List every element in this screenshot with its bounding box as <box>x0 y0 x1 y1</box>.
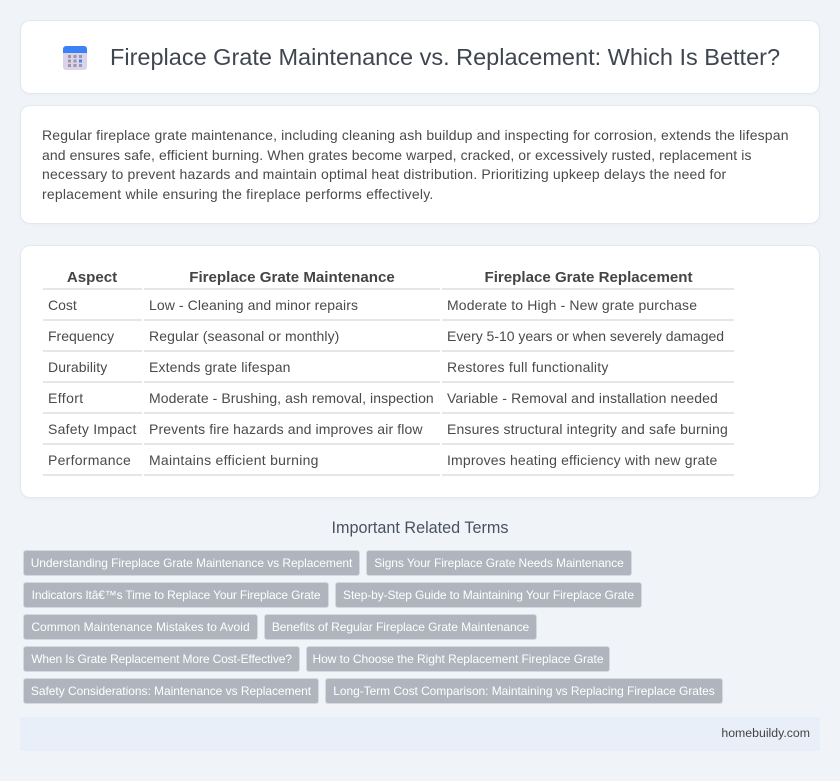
row: frequency: Frequency <box>48 328 114 344</box>
table header: Fireplace Grate Replacement <box>484 269 693 286</box>
tag <box>23 646 300 672</box>
row: frequency: Regular (seasonal or monthly) <box>149 328 339 344</box>
row: performance <box>48 452 717 468</box>
tag: Indicators Itâ€™s Time to Replace Your Fireplace Grate <box>32 588 320 602</box>
row: performance: Performance <box>48 452 131 468</box>
row: durability: Extends grate lifespan <box>149 359 291 375</box>
row: cost <box>48 297 697 313</box>
tag <box>23 614 258 640</box>
row: cost: Cost <box>48 297 77 313</box>
row: frequency <box>48 328 724 344</box>
tag <box>366 550 632 576</box>
tag <box>335 582 642 608</box>
tag: Safety Considerations: Maintenance vs Replacement <box>31 684 311 698</box>
row: safety impact: Safety Impact <box>48 421 137 437</box>
table header: Aspect <box>67 269 117 286</box>
intro text: and ensures safe, efficient burning. When grates become warped, cracked, or excessively rusted, replacement is <box>42 146 752 162</box>
row: safety impact: Ensures structural integrity and safe burning <box>447 421 728 437</box>
row: cost: Low - Cleaning and minor repairs <box>149 297 358 313</box>
row: frequency: Every 5-10 years or when severely damaged <box>447 328 724 344</box>
tag: Long-Term Cost Comparison: Maintaining vs Replacing Fireplace Grates <box>333 684 715 698</box>
title: Fireplace Grate Maintenance vs. Replacement: Which Is Better? <box>110 44 780 70</box>
row: effort <box>48 390 718 406</box>
row: effort: Variable - Removal and installation needed <box>447 390 718 406</box>
panel: title header <box>20 20 820 94</box>
tag: Benefits of Regular Fireplace Grate Maintenance <box>272 620 529 634</box>
table header <box>67 269 693 286</box>
row: safety impact <box>48 421 728 437</box>
intro text: necessary to prevent hazards and maintain optimal heat distribution. Prioritizing upkeep delays the need for <box>42 166 726 182</box>
heading: related terms: Important Related Terms <box>332 519 508 537</box>
tag <box>306 646 610 672</box>
tag: When Is Grate Replacement More Cost-Effective? <box>31 652 292 666</box>
row: performance: Improves heating efficiency with new grate <box>447 452 717 468</box>
row: durability: Restores full functionality <box>447 359 609 375</box>
tag <box>264 614 537 640</box>
tag <box>23 678 319 704</box>
icon: calendar <box>63 46 87 70</box>
tag: Signs Your Fireplace Grate Needs Maintenance <box>374 556 624 570</box>
row: effort: Moderate - Brushing, ash removal, inspection <box>149 390 434 406</box>
row: performance: Maintains efficient burning <box>149 452 319 468</box>
footer source text: homebuildy.com <box>721 726 810 740</box>
row: safety impact: Prevents fire hazards and improves air flow <box>149 421 423 437</box>
tag <box>23 550 360 576</box>
footer bar <box>20 717 820 751</box>
tag <box>23 582 329 608</box>
intro text: Regular fireplace grate maintenance, including cleaning ash buildup and inspecting for corrosion, extends the lifespan <box>42 127 789 143</box>
row: durability <box>48 359 609 375</box>
related terms tags <box>23 550 723 704</box>
row: effort: Effort <box>48 390 84 406</box>
row: durability: Durability <box>48 359 107 375</box>
tag: Common Maintenance Mistakes to Avoid <box>31 620 250 634</box>
tag <box>325 678 723 704</box>
comparison table <box>43 269 734 476</box>
tag: Understanding Fireplace Grate Maintenance vs Replacement <box>31 556 352 570</box>
intro text: replacement while ensuring the fireplace performs effectively. <box>42 186 433 202</box>
intro text <box>42 127 789 202</box>
tag: Step-by-Step Guide to Maintaining Your Fireplace Grate <box>343 588 634 602</box>
row: cost: Moderate to High - New grate purchase <box>447 297 697 313</box>
tag: How to Choose the Right Replacement Fireplace Grate <box>313 652 603 666</box>
panel: comparison table <box>20 245 820 498</box>
table header: Fireplace Grate Maintenance <box>189 269 395 286</box>
panel: intro paragraph <box>20 105 820 224</box>
